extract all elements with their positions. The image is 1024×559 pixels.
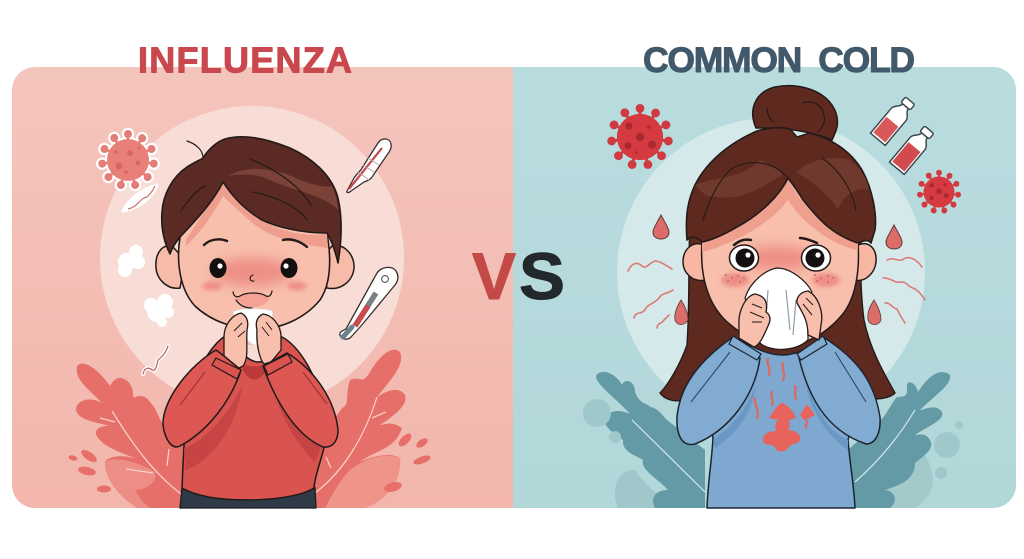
boy: neck skin <box>225 322 284 345</box>
boy: hair highlight <box>228 169 338 210</box>
panel: influenza background <box>12 67 513 508</box>
girl: tissue <box>745 268 812 349</box>
girl: left cuff <box>729 336 761 360</box>
foliage: cold left leaf <box>596 372 705 508</box>
boy: left cuff <box>212 358 241 379</box>
girl: forehead shadow <box>702 178 858 252</box>
foliage: influenza left leaf <box>76 364 190 508</box>
droplet marks: influenza foliage <box>68 432 432 494</box>
boy: nose blush <box>212 258 292 286</box>
panel: common cold background <box>513 67 1016 508</box>
icon: thermometer large <box>340 267 398 339</box>
girl: hair bun <box>753 86 837 140</box>
girl: freckles <box>725 274 834 283</box>
decorative bubbles: cold foliage <box>583 399 963 479</box>
girl: right cuff <box>797 336 827 360</box>
girl: right ear <box>854 244 876 281</box>
boy: mouth <box>233 291 272 308</box>
halo circle: influenza <box>100 106 404 410</box>
boy: eyes <box>210 258 298 278</box>
title: influenza: INFLUENZA <box>138 40 352 80</box>
boy: hair strands <box>181 141 311 220</box>
girl: left ear <box>683 244 706 281</box>
boy: right sleeve <box>263 353 338 447</box>
girl: right eye <box>802 245 830 271</box>
girl: eyebrows <box>734 238 817 245</box>
foliage: influenza right leaf <box>310 350 405 508</box>
boy: pants <box>180 488 316 508</box>
boy: sweater torso <box>182 336 327 500</box>
boy: right cuff <box>264 354 292 375</box>
boy: left ear <box>156 246 185 288</box>
icon: cold virus small <box>918 171 960 213</box>
icon: steam puffs <box>118 245 174 327</box>
boy: right hand <box>256 314 281 364</box>
boy: sweater shadow under arms <box>184 382 322 470</box>
icon: fever wavy lines <box>628 258 925 328</box>
girl: hair strands <box>703 158 856 220</box>
icon: wavy cough line <box>143 346 168 374</box>
boy: finger lines <box>234 322 272 337</box>
boy: sweater collar shading <box>240 362 268 380</box>
character: influenza boy <box>156 137 354 508</box>
boy: eyebrows <box>204 239 307 247</box>
girl: sleeve creases <box>691 352 866 402</box>
girl: chest graphic <box>755 359 815 452</box>
girl: sweater torso <box>706 337 855 508</box>
girl: nose blush <box>740 246 816 270</box>
boy: forehead shadow <box>186 182 328 248</box>
icon: medicine vial 1 <box>870 95 918 145</box>
icon: cold virus large <box>608 105 672 168</box>
vs label <box>472 239 565 313</box>
icon: sweat drops <box>653 215 902 249</box>
girl: left eye <box>730 245 758 271</box>
icon: thermometer small <box>347 139 391 192</box>
girl: cheek blush <box>721 273 840 287</box>
boy: hair <box>162 137 341 263</box>
boy: left sleeve <box>163 350 241 447</box>
title: common cold: COMMON COLD <box>643 40 915 80</box>
boy: cheek blush <box>202 282 307 290</box>
boy: right ear <box>320 246 354 288</box>
girl: right hand <box>797 291 822 340</box>
boy: tissue <box>233 309 272 345</box>
boy: nose <box>250 275 254 281</box>
girl: side drops at hair <box>675 300 881 324</box>
girl: hair highlight <box>695 158 869 210</box>
character: common cold girl <box>660 86 895 508</box>
boy: sleeve creases <box>180 372 327 405</box>
vs label: V <box>472 239 516 313</box>
girl: finger lines <box>750 298 813 322</box>
boy: left hand <box>224 313 248 369</box>
halo circle: common cold <box>617 119 925 384</box>
girl: face <box>702 175 858 346</box>
boy: face <box>179 170 330 329</box>
foliage: cold right leaf <box>848 372 950 508</box>
girl: right sleeve <box>799 337 880 444</box>
girl: left hand <box>739 294 770 347</box>
vs label: S <box>519 239 565 313</box>
icon: medicine vial 2 <box>889 124 937 174</box>
icon: wisp near virus <box>123 185 157 211</box>
girl: sweater shadow under arms <box>713 385 848 450</box>
girl: top hair <box>686 128 875 243</box>
icon: influenza virus <box>99 131 157 188</box>
girl: tissue folds <box>766 290 796 335</box>
girl: long back hair <box>660 225 895 401</box>
girl: left sleeve <box>677 337 760 444</box>
